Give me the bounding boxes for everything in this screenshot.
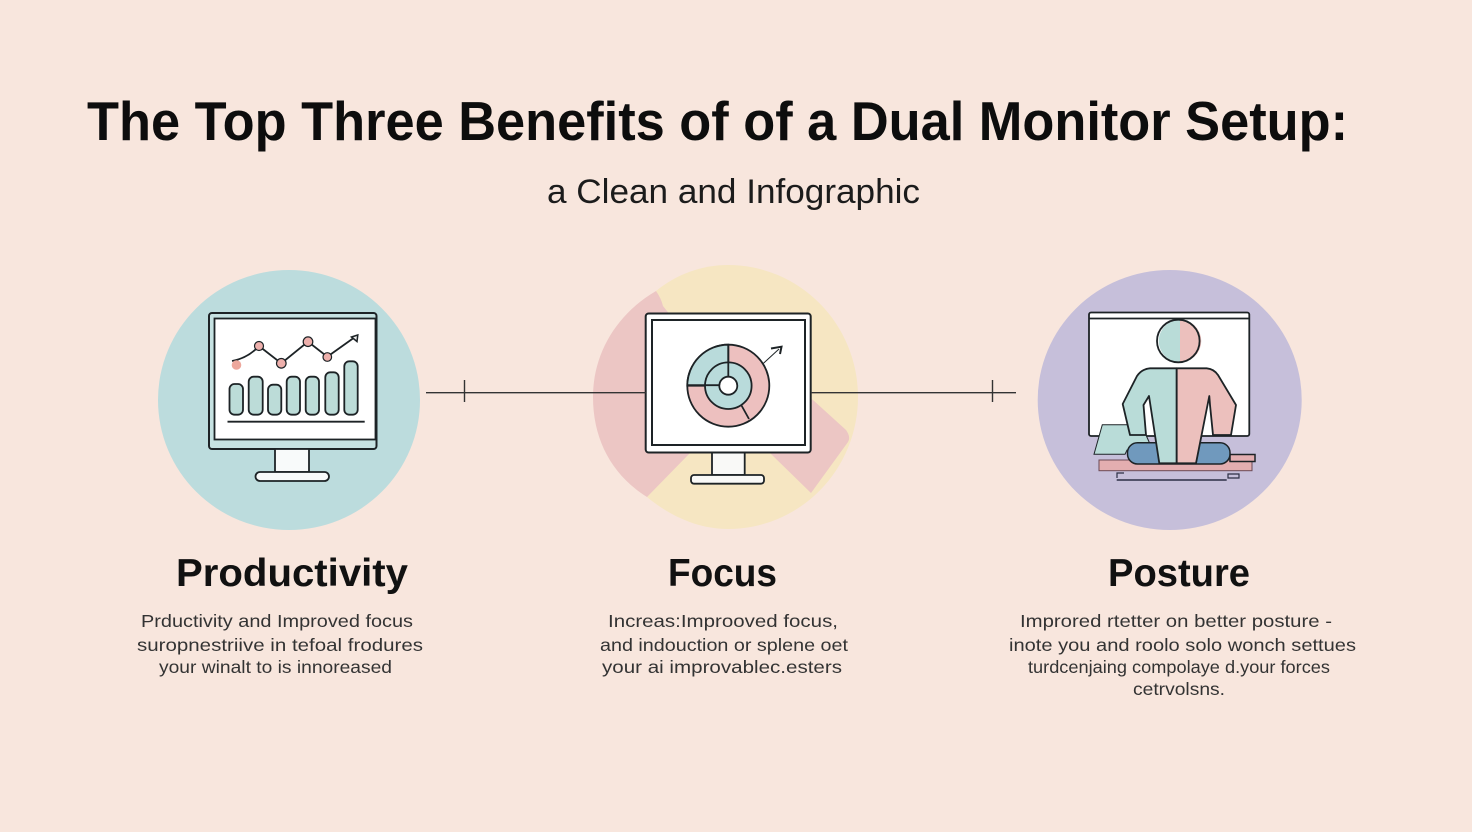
description: focus: Increas:Improoved focus,: [608, 611, 838, 631]
donut chart: [687, 345, 769, 427]
heading: productivity: Productivity: [176, 552, 408, 595]
panel: focus: [593, 265, 858, 677]
panel: posture: [1009, 270, 1356, 699]
description: posture: turdcenjaing compolaye d.your forces: [1028, 657, 1330, 677]
connector: focus to posture: [811, 380, 1016, 402]
line chart with arrow: [232, 335, 358, 370]
description: productivity: your winalt to is innoreased: [159, 657, 392, 677]
description: focus: [600, 611, 848, 677]
subtitle: a Clean and Infographic: [547, 173, 920, 211]
description: posture: Improred rtetter on better posture -: [1020, 611, 1332, 631]
description: productivity: Prductivity and Improved focus: [141, 611, 413, 631]
bar chart: [230, 361, 358, 415]
arm rest: [1128, 443, 1230, 464]
icon background: teal circle: [158, 270, 420, 530]
torso: [1123, 368, 1236, 463]
title: The Top Three Benefits of of a Dual Monitor Setup:: [87, 90, 1348, 152]
icon: monitor with donut chart: [646, 314, 811, 484]
description: focus: and indouction or splene oet: [600, 635, 848, 655]
heading: focus: Focus: [668, 552, 777, 595]
head: [1157, 320, 1201, 362]
icon: monitor with chart: [209, 313, 376, 481]
icon: person at desk: [1089, 312, 1255, 480]
description: posture: inote you and roolo solo wonch settues: [1009, 635, 1356, 655]
monitor: [1089, 312, 1249, 436]
desk: [1099, 454, 1255, 480]
description: productivity: [137, 611, 423, 677]
description: focus: your ai improvablec.esters: [602, 657, 842, 677]
description: posture: cetrvolsns.: [1133, 679, 1225, 699]
description: productivity: suropnestriive in tefoal frodures: [137, 635, 423, 655]
icon background: yellow and pink circle: [593, 265, 858, 529]
description: posture: [1009, 611, 1356, 699]
panel: productivity: [137, 270, 423, 677]
laptop: [1094, 425, 1150, 454]
connector: productivity to focus: [426, 380, 646, 402]
arrow: [764, 347, 782, 363]
heading: posture: Posture: [1108, 552, 1250, 595]
icon background: lavender circle: [1038, 270, 1302, 530]
